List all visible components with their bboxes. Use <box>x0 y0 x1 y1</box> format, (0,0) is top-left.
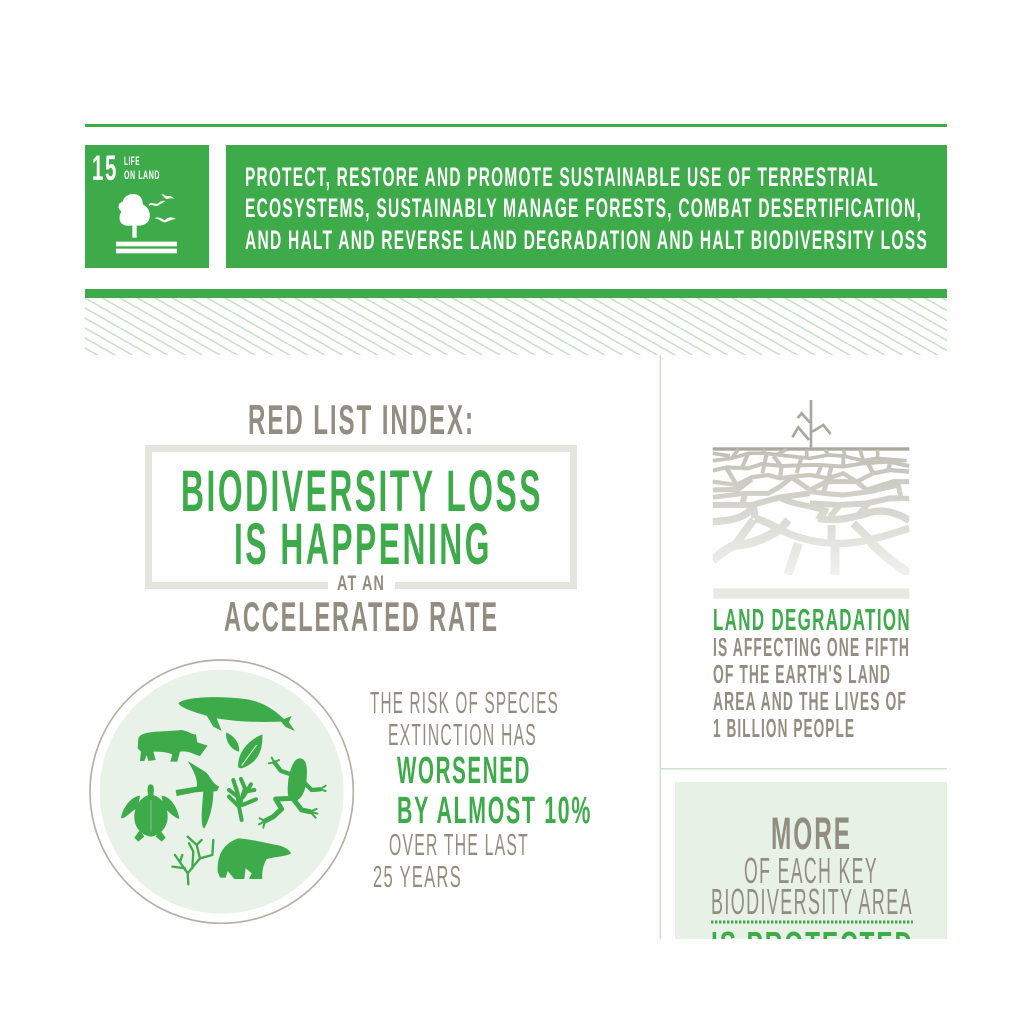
text block: risk of extinction <box>370 685 592 894</box>
goal name: LIFE <box>124 154 140 168</box>
soil surface <box>713 447 909 451</box>
panel: goal statement <box>226 145 947 268</box>
accelerated rate: ACCELERATED RATE <box>224 593 499 640</box>
text block: risk of extinction: 25 YEARS <box>373 859 462 894</box>
dotted rule <box>711 920 913 924</box>
whale <box>178 697 295 731</box>
text block: land degradation: 1 BILLION PEOPLE <box>713 713 855 743</box>
headline: biodiversity loss: BIODIVERSITY LOSS <box>181 459 543 524</box>
text block: risk of extinction: WORSENED <box>397 750 531 792</box>
text block: risk of extinction: EXTINCTION HAS <box>388 717 537 752</box>
headline: biodiversity loss: IS HAPPENING <box>234 512 492 577</box>
ground bar <box>713 588 909 599</box>
icon: species circle <box>90 660 353 923</box>
at an: AT AN <box>337 572 385 595</box>
goal name: ON LAND <box>124 168 160 182</box>
turtle <box>121 784 179 842</box>
rhino <box>138 730 208 762</box>
panel: SDG 15 badge <box>85 145 209 268</box>
panel: red list index <box>148 396 574 640</box>
polar bear <box>218 838 291 879</box>
goal number: 15 <box>92 149 118 188</box>
coral <box>172 837 213 884</box>
more: MORE <box>771 808 852 859</box>
heading: red list index: RED LIST INDEX: <box>248 396 475 443</box>
text block: risk of extinction: BY ALMOST 10% <box>397 790 592 832</box>
goal statement text <box>245 162 928 255</box>
bird <box>176 761 219 829</box>
dry plant <box>792 400 831 447</box>
text block: land degradation <box>713 602 911 743</box>
thick rule with hatched band <box>85 289 947 355</box>
icon: cracked land <box>713 400 909 599</box>
headline frame <box>148 448 574 586</box>
panel: key biodiversity areas: OF EACH KEY <box>744 850 878 891</box>
frog <box>259 758 326 828</box>
soil cracks <box>713 449 909 575</box>
icon: tree and birds <box>116 194 177 253</box>
text block: risk of extinction: THE RISK OF SPECIES <box>370 685 559 720</box>
panel: key biodiversity areas <box>675 782 947 939</box>
panel dividers <box>660 355 947 939</box>
goal name <box>124 154 160 182</box>
seaweed <box>229 779 256 820</box>
top rule <box>85 124 947 127</box>
leaves <box>226 732 262 768</box>
is protected: IS PROTECTED <box>711 924 914 965</box>
headline: biodiversity loss <box>181 459 543 577</box>
text block: risk of extinction: OVER THE LAST <box>389 827 529 862</box>
